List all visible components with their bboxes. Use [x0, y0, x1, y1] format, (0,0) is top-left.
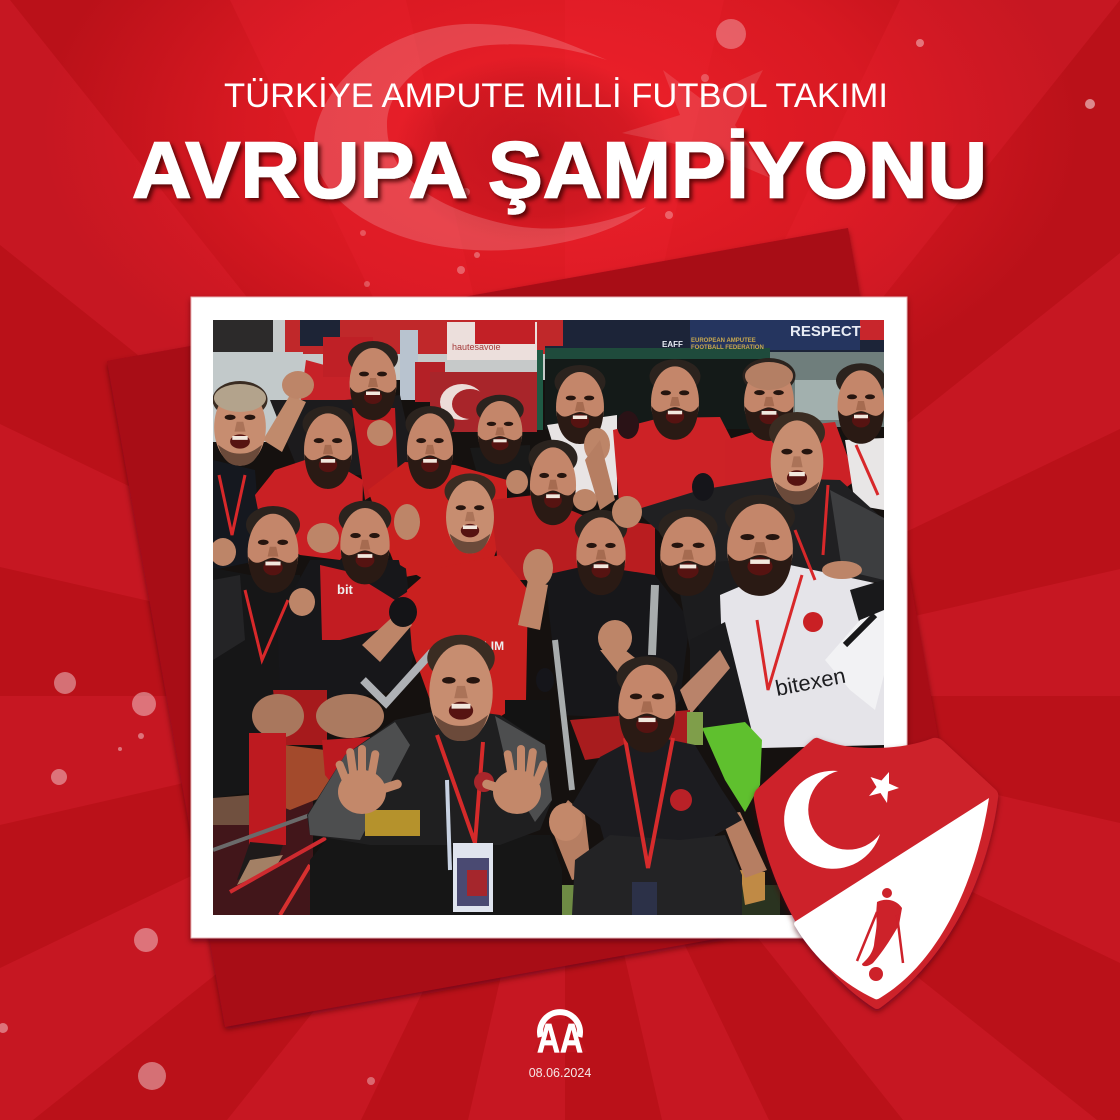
- AA agency logo: AA: [537, 1015, 583, 1061]
- team photo: [210, 320, 886, 915]
- shield white field: [794, 798, 989, 999]
- text: scarf sponsor: bit: [337, 582, 354, 597]
- text: sponsor on red jersey: ATILIM: [465, 639, 504, 653]
- federation shield logo: [754, 738, 998, 1009]
- middle row bodies: [213, 478, 884, 812]
- dark red backing panel: [107, 228, 966, 1027]
- legs, socks and track: [213, 585, 780, 915]
- stadium backdrop: RESPECT: [790, 323, 861, 340]
- front left man: jacket and pants: [307, 708, 562, 915]
- red lanyards and logos: [219, 445, 878, 690]
- stadium backdrop: [213, 320, 884, 442]
- text: sponsor: bitexen: [773, 663, 848, 701]
- team crest on Q's jersey: [803, 612, 823, 632]
- stadium backdrop: EUROPEAN AMPUTEE: [691, 338, 756, 344]
- faces: [212, 341, 886, 596]
- front right man: body: [549, 738, 767, 915]
- title: main heading: AVRUPA ŞAMPİYONU: [132, 126, 987, 214]
- front left man: raised hands: [334, 745, 549, 814]
- date: 08.06.2024: [529, 1066, 591, 1080]
- back row bodies: [213, 395, 884, 580]
- stadium backdrop: hautesavoie: [452, 342, 501, 352]
- front left man: head: [427, 635, 495, 741]
- star: [869, 772, 899, 803]
- white photo frame: [191, 297, 907, 938]
- front right man: head: [616, 656, 678, 753]
- crescent: [784, 771, 880, 869]
- front left man: lanyard and badge: [437, 735, 494, 912]
- fists and gloves: [210, 371, 862, 692]
- title: subtitle: TÜRKİYE AMPUTE MİLLİ FUTBOL TAKIMI: [224, 77, 888, 115]
- stadium backdrop: EAFF: [662, 340, 683, 349]
- ghost crescent and star: [314, 24, 770, 250]
- stadium backdrop: FOOTBALL FEDERATION: [691, 345, 764, 351]
- player silhouette with crutches: [857, 888, 903, 981]
